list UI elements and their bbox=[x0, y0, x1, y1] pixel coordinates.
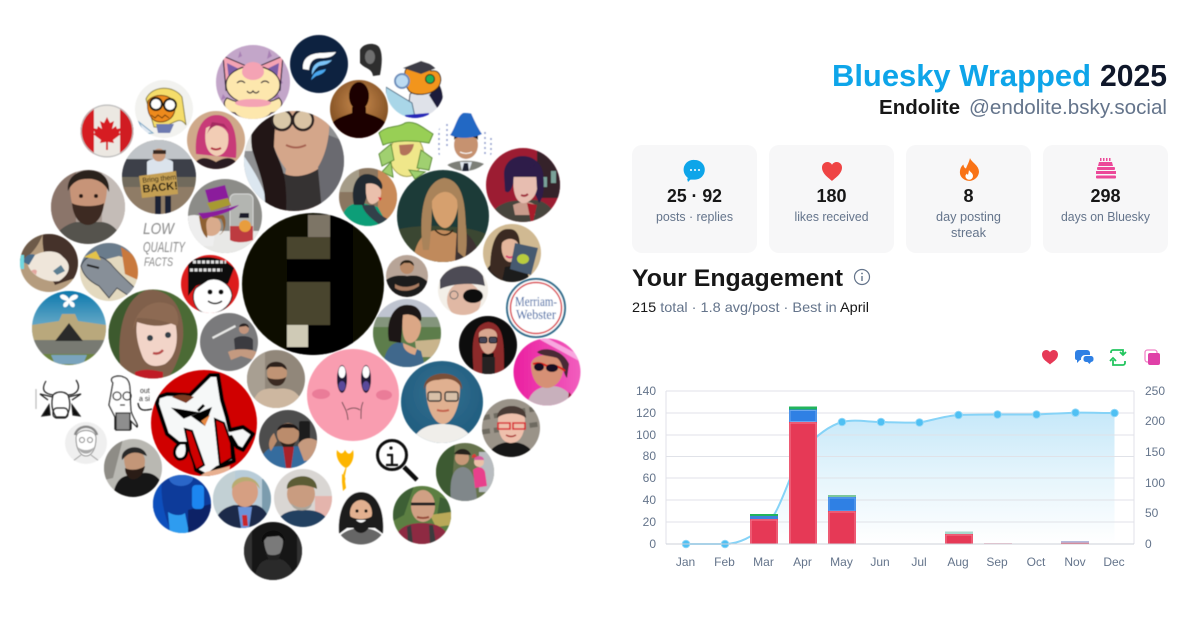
right axis labels bbox=[1145, 384, 1165, 551]
avatar: Louvre pyramid bbox=[32, 291, 106, 365]
avatar: Low Quality Facts handwriting: FACTS bbox=[144, 255, 173, 269]
avatar: man on the phone bbox=[259, 410, 317, 468]
bar: Sep bbox=[984, 543, 1012, 544]
avatar: woman with teal jacket bbox=[339, 168, 398, 226]
left axis labels: 0 bbox=[649, 537, 656, 551]
avatar: bull doodle bbox=[36, 380, 81, 418]
title: Bluesky Wrapped bbox=[832, 59, 1091, 93]
stat card: likes received: 180 bbox=[816, 186, 847, 206]
avatar: blue wing logo bbox=[290, 35, 348, 93]
month labels: Aug bbox=[947, 555, 969, 569]
avatar: blue selfie bbox=[153, 470, 211, 533]
left axis labels: 40 bbox=[643, 493, 656, 507]
avatar: woman with glasses bbox=[244, 110, 344, 211]
chart grid bbox=[666, 391, 1134, 544]
bar: Nov bbox=[1061, 541, 1089, 544]
month labels: Jul bbox=[911, 555, 927, 569]
bar: May bbox=[828, 495, 856, 544]
avatar: woman holding a book bbox=[483, 224, 541, 282]
right axis labels: 150 bbox=[1145, 445, 1165, 459]
avatar: shark bbox=[80, 243, 138, 301]
avatar: pirate with eyepatch bbox=[438, 265, 488, 318]
avatar: Kirby bbox=[307, 349, 399, 441]
avatar: Ludicolo bbox=[379, 122, 433, 179]
icon: cake bbox=[1096, 158, 1116, 178]
avatar: grumpy cat bbox=[20, 234, 78, 292]
month labels: Mar bbox=[753, 555, 774, 569]
avatar: small sketch bbox=[360, 44, 382, 76]
stat card: likes received: likes received bbox=[794, 209, 868, 224]
month labels: Dec bbox=[1103, 555, 1125, 569]
avatar: pink-haired woman bbox=[187, 111, 245, 169]
month labels: Jun bbox=[870, 555, 890, 569]
avatar: protester with sign: Bring them bbox=[142, 174, 177, 185]
panel: avatar circle pack bbox=[20, 35, 581, 580]
heading: Your Engagement: Your Engagement bbox=[632, 265, 843, 292]
avatar: red comic bbox=[181, 255, 239, 314]
icon: heart bbox=[822, 162, 842, 181]
stat card: day posting streak: 8 bbox=[963, 186, 974, 206]
avatar: Low Quality Facts handwriting bbox=[143, 221, 186, 269]
right axis labels: 250 bbox=[1145, 384, 1165, 398]
bar: Mar bbox=[750, 514, 778, 544]
stat card: likes received bbox=[769, 145, 894, 253]
left axis labels: 140 bbox=[636, 384, 656, 398]
avatar: Low Quality Facts handwriting: QUALITY bbox=[143, 239, 186, 256]
stat card: day posting streak: day posting bbox=[936, 209, 1001, 224]
right axis labels: 100 bbox=[1145, 476, 1165, 490]
x axis baseline bbox=[666, 543, 1134, 545]
avatar: silhouette bbox=[330, 80, 388, 139]
month labels: Oct bbox=[1027, 555, 1046, 569]
icon: legend replies bbox=[1075, 350, 1094, 364]
avatar: bearded man with beige sweater bbox=[247, 350, 305, 408]
avatar: magnifying glass info icon bbox=[378, 440, 417, 480]
avatar: cartoon bearded man bbox=[334, 491, 388, 545]
stat card: day posting streak bbox=[906, 145, 1031, 253]
right axis labels: 200 bbox=[1145, 414, 1165, 428]
avatar: protester with sign bbox=[122, 140, 196, 214]
avatar: man in beanie bbox=[274, 469, 332, 527]
line markers bbox=[682, 409, 1118, 548]
month labels: Nov bbox=[1064, 555, 1086, 569]
avatar: man in black hoodie bbox=[104, 439, 162, 497]
avatar: man with glasses on blue bbox=[401, 361, 483, 443]
icon: legend heart bbox=[1042, 350, 1058, 364]
avatar: Merriam-Webster logo bbox=[507, 279, 565, 337]
avatar: woman in purple top hat bbox=[188, 179, 262, 253]
combo chart: monthly engagement bbox=[636, 384, 1165, 569]
icon: info bbox=[854, 270, 870, 284]
stat card: days on Bluesky: 298 bbox=[1090, 186, 1121, 206]
avatar: pumpkin character bbox=[135, 80, 193, 138]
avatar: goth woman purple hair bbox=[486, 148, 560, 222]
left axis labels: 100 bbox=[636, 428, 656, 442]
month labels: Jan bbox=[676, 555, 695, 569]
avatar: pencil sketch man bbox=[65, 422, 107, 464]
title: 2025 bbox=[1100, 59, 1167, 93]
stat card: posts and replies: posts · replies bbox=[656, 209, 733, 224]
cumulative area bbox=[686, 413, 1114, 544]
avatar: turtle scholar bbox=[386, 60, 444, 119]
user name and handle: Endolite bbox=[879, 96, 960, 119]
legend icons bbox=[1042, 350, 1160, 365]
cumulative line bbox=[686, 413, 1114, 544]
avatar: man carrying child bbox=[436, 443, 494, 501]
avatar: bald man with glasses bbox=[393, 486, 451, 544]
icon: legend reposts bbox=[1110, 350, 1126, 365]
left axis labels: 80 bbox=[643, 449, 656, 463]
stacked bars bbox=[750, 406, 1089, 544]
avatar: man in navy suit bbox=[213, 470, 271, 528]
left axis labels: 60 bbox=[643, 471, 656, 485]
avatar: doodle girl bbox=[109, 376, 152, 430]
avatar: man with red glasses bbox=[482, 399, 540, 457]
avatar: man with red sunglasses on pink bbox=[513, 338, 581, 406]
stat card: day posting streak: streak bbox=[951, 225, 986, 240]
avatar: yellow wu-tang balloon bbox=[337, 450, 354, 491]
engagement summary: 215 total · 1.8 avg/post · Best in April bbox=[632, 299, 869, 315]
month labels: Apr bbox=[793, 555, 812, 569]
avatar: woman with denim jacket bbox=[373, 299, 441, 367]
avatar: black and white portrait bbox=[244, 522, 302, 580]
avatar: man with blue party hat bbox=[436, 113, 494, 171]
left axis labels bbox=[636, 384, 656, 551]
avatar: girl with bangs bbox=[108, 289, 198, 379]
month labels: Sep bbox=[986, 555, 1008, 569]
avatar: blond dreadlocked man bbox=[397, 170, 489, 262]
user name and handle bbox=[879, 96, 1167, 119]
avatar: bearded man in turtleneck bbox=[51, 170, 125, 244]
avatar: doodle girl: a si bbox=[139, 396, 150, 403]
avatar: red-haired woman bbox=[459, 316, 517, 374]
avatar: man sitting on road bbox=[200, 313, 259, 371]
month labels bbox=[676, 555, 1125, 569]
avatar: red cat illustration bbox=[151, 370, 257, 476]
icon: chat bubble bbox=[684, 160, 705, 182]
avatar: Canadian flag bbox=[80, 104, 134, 158]
right axis labels: 0 bbox=[1145, 537, 1152, 551]
left axis labels: 120 bbox=[636, 406, 656, 420]
stat card: days on Bluesky bbox=[1043, 145, 1168, 253]
stat card: posts and replies: 25 · 92 bbox=[667, 186, 722, 206]
avatar: protester with sign: BACK! bbox=[142, 180, 178, 196]
stat card: days on Bluesky: days on Bluesky bbox=[1061, 209, 1150, 224]
bar: Apr bbox=[789, 406, 817, 544]
avatar: man in black t-shirt bbox=[386, 255, 428, 297]
avatar: Merriam-Webster logo: Webster bbox=[516, 308, 556, 323]
icon: legend quotes bbox=[1145, 350, 1160, 365]
avatar: Low Quality Facts handwriting: LOW bbox=[143, 221, 176, 238]
avatar: Merriam-Webster logo: Merriam- bbox=[515, 295, 557, 310]
icon: flame bbox=[960, 158, 979, 181]
avatar: doodle girl: out bbox=[140, 388, 150, 395]
bar: Aug bbox=[945, 532, 973, 544]
user name and handle: @endolite.bsky.social bbox=[969, 96, 1167, 119]
left axis labels: 20 bbox=[643, 515, 656, 529]
right axis labels: 50 bbox=[1145, 506, 1159, 520]
avatar: Skitty cartoon bbox=[216, 45, 290, 120]
stat card: posts and replies bbox=[632, 145, 757, 253]
month labels: May bbox=[830, 555, 853, 569]
month labels: Feb bbox=[714, 555, 735, 569]
avatar: large black pixel image bbox=[242, 213, 384, 355]
